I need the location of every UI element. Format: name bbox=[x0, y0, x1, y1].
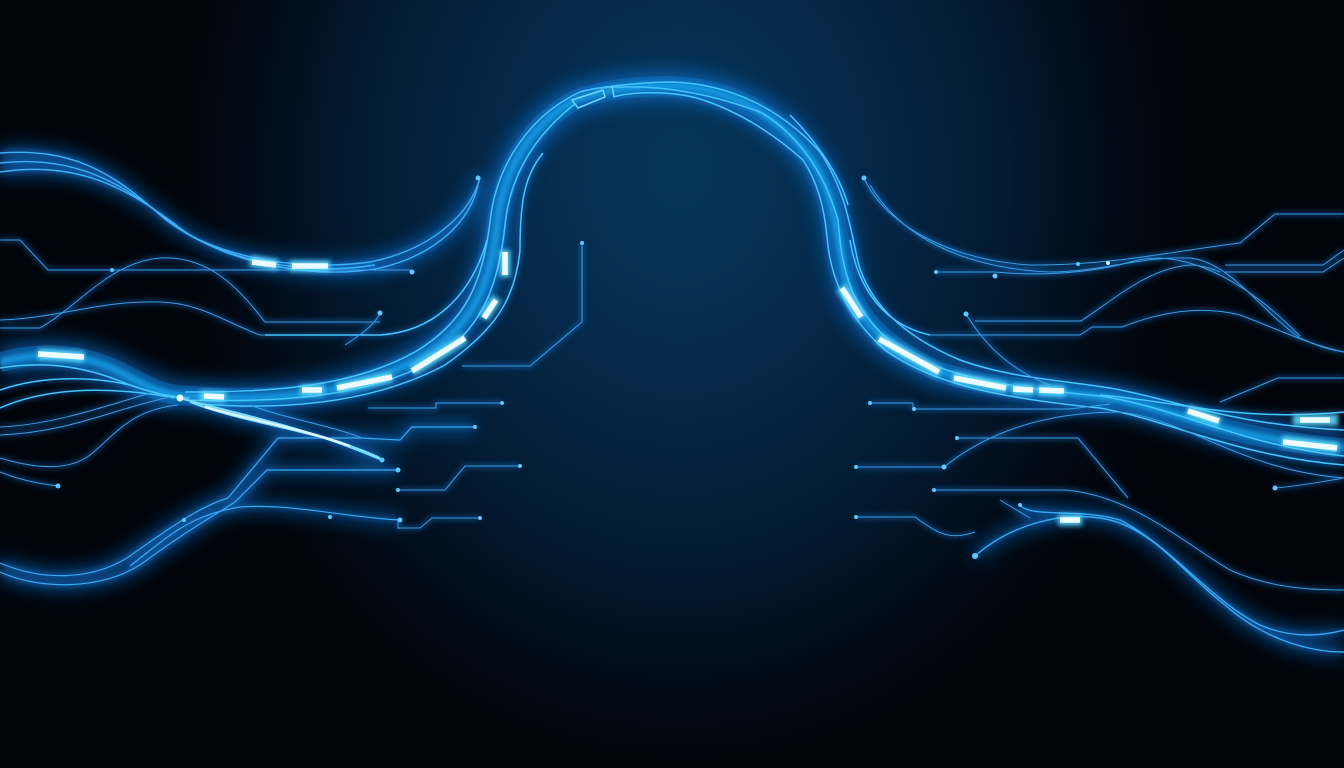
ribbon highlight bbox=[205, 407, 350, 446]
upper-left wave bbox=[0, 152, 480, 272]
thin wire glow bbox=[0, 82, 1344, 652]
lower-right wave bbox=[975, 505, 1344, 652]
lower-left wave bbox=[0, 427, 475, 585]
node dots bbox=[56, 176, 1278, 559]
fibre band core bbox=[0, 86, 1344, 448]
bright segments on the fibres bbox=[38, 250, 1338, 520]
arch gap pieces at the top bbox=[572, 86, 614, 108]
fibre band fill bbox=[0, 86, 1344, 448]
crossing ribbon to lower left node bbox=[180, 398, 382, 460]
halo behind all strands bbox=[0, 86, 1344, 652]
secondary left wires bbox=[0, 240, 582, 528]
secondary right wires bbox=[856, 178, 1344, 590]
main arch strands bbox=[0, 82, 1344, 465]
